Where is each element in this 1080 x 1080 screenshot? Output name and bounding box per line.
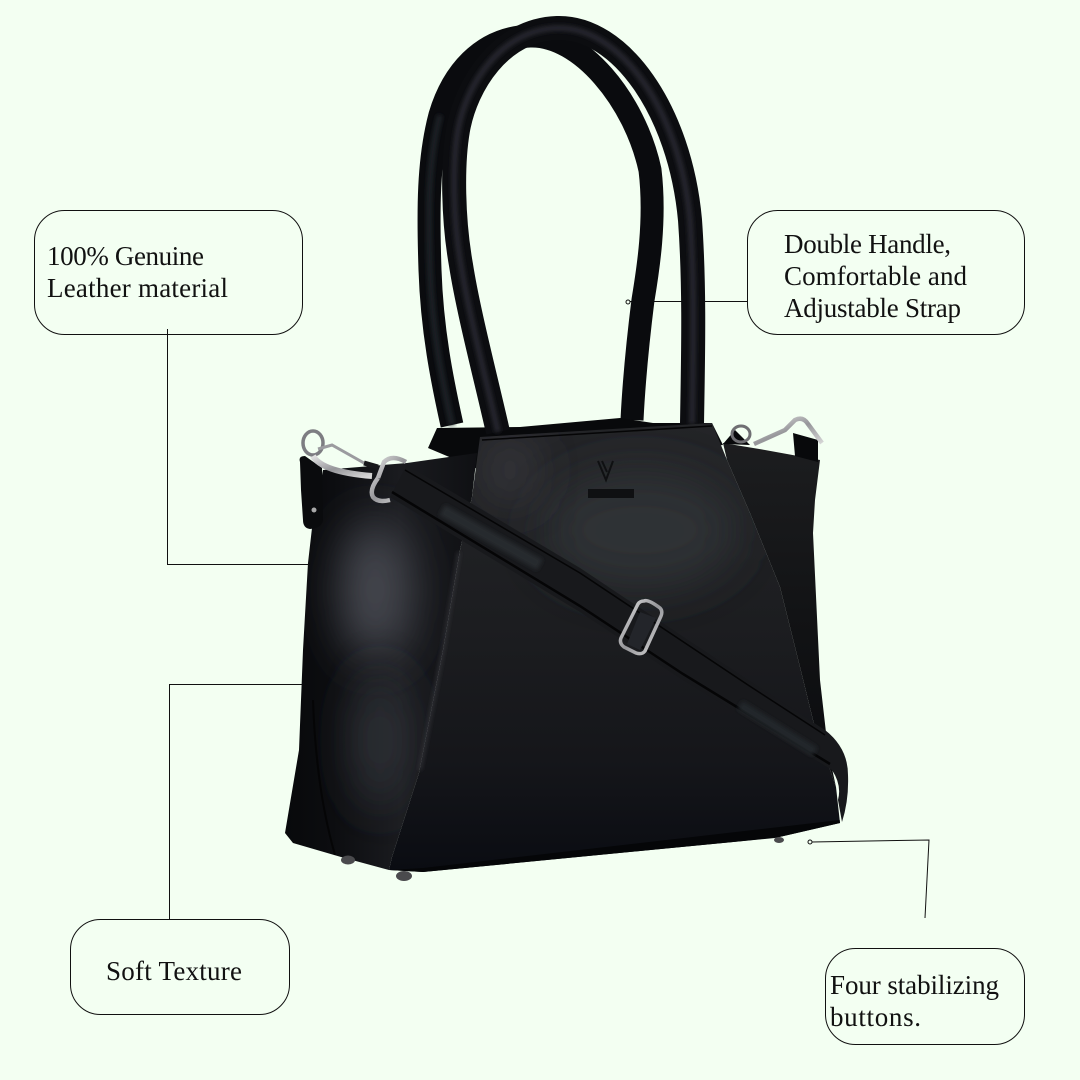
callout: genuine leather	[34, 210, 302, 334]
callout: double handle	[748, 210, 1024, 334]
logo stamp	[588, 461, 634, 498]
callout: stabilizing buttons: buttons.	[830, 1002, 921, 1032]
front panel	[389, 423, 840, 878]
back panel	[428, 418, 723, 470]
callout: double handle: Double Handle,	[784, 229, 951, 259]
right clasp hardware	[723, 419, 822, 462]
feet	[341, 837, 784, 881]
callout: double handle: Adjustable Strap	[784, 293, 961, 323]
callout: stabilizing buttons: Four stabilizing	[830, 970, 999, 1000]
callout: stabilizing buttons	[826, 948, 1024, 1044]
panel seam highlight	[420, 552, 459, 770]
callout: double handle: Comfortable and	[784, 261, 968, 291]
left side panel	[285, 453, 477, 870]
callout: soft texture	[70, 920, 290, 1014]
callout: genuine leather: 100% Genuine	[47, 241, 204, 271]
front handle	[454, 28, 693, 432]
leader line: texture	[170, 684, 302, 920]
shoulder strap	[390, 465, 848, 822]
leader line: handle	[626, 300, 748, 304]
handbag photo illustration	[285, 28, 848, 881]
leader line: buttons	[808, 840, 929, 918]
left clasp hardware	[300, 431, 406, 529]
right gusset	[723, 443, 836, 787]
back handle	[429, 36, 652, 425]
callout: genuine leather: Leather material	[47, 273, 228, 303]
callout: soft texture: Soft Texture	[106, 956, 242, 986]
leader line: leather	[168, 329, 308, 564]
strap buckle	[620, 601, 662, 654]
